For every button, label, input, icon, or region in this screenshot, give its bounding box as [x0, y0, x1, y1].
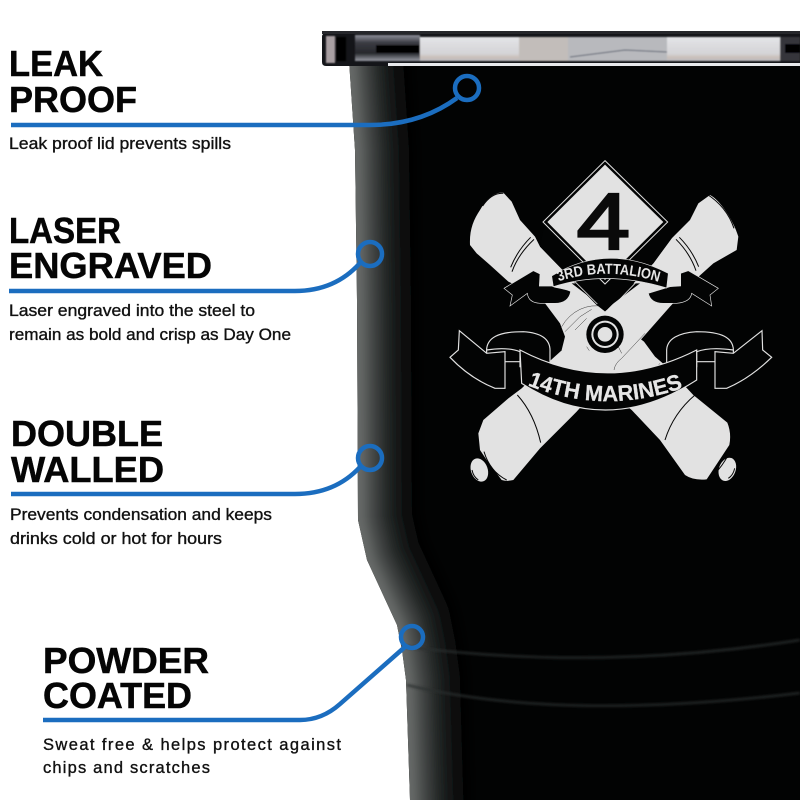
cannon knobs: [467, 455, 739, 484]
heading: double walled: WALLED: [11, 449, 164, 490]
heading: leak proof: PROOF: [9, 79, 137, 120]
text: double walled: [10, 506, 272, 548]
connector: double walled: [11, 446, 382, 494]
cannon detail lines: [472, 193, 735, 480]
black wedges along diamond: [540, 222, 672, 310]
ribbon: 3rd Battalion: [504, 258, 719, 307]
text: laser engraved: Laser engraved into the steel to: [9, 302, 255, 320]
hand sketch lines: [562, 306, 660, 370]
connector: powder coated: [43, 626, 423, 720]
ribbon: 14th Marines: [449, 330, 772, 411]
text: leak proof: Leak proof lid prevents spills: [9, 135, 231, 153]
heading: laser engraved: LASER: [9, 210, 121, 251]
connector: leak proof: [11, 76, 479, 125]
ribbon: 3rd Battalion: 3RD BATTALION: [556, 264, 660, 282]
text: powder coated: chips and scratches: [43, 759, 210, 777]
ring: [586, 316, 624, 353]
cannon: upper left to lower right: [470, 193, 730, 480]
heading: double walled: [11, 413, 164, 490]
heading: leak proof: LEAK: [9, 43, 103, 84]
diamond: [543, 161, 668, 284]
heading: laser engraved: [9, 210, 212, 286]
tumbler body: [345, 0, 800, 800]
heading: powder coated: [43, 640, 209, 716]
cannon: upper right to lower left: [478, 195, 738, 481]
ribbon: 14th Marines: 14TH MARINES: [528, 372, 682, 402]
text: powder coated: Sweat free & helps protect against: [43, 736, 341, 754]
text: laser engraved: remain as bold and crisp as Day One: [9, 326, 291, 344]
text: double walled: drinks cold or hot for hours: [10, 530, 222, 548]
text: double walled: Prevents condensation and keeps: [10, 506, 272, 524]
heading: laser engraved: ENGRAVED: [9, 245, 212, 286]
connector: laser engraved: [9, 242, 382, 291]
text: powder coated: [43, 736, 341, 777]
heading: powder coated: POWDER: [43, 640, 209, 681]
diamond: 4: [577, 177, 630, 266]
tumbler lid: [322, 31, 800, 66]
callout: double walled: [10, 413, 382, 548]
heading: powder coated: COATED: [43, 675, 192, 716]
heading: leak proof: [9, 43, 137, 120]
callout: powder coated: [43, 626, 423, 777]
callout: leak proof: [9, 43, 479, 153]
thin lines below diamond: [575, 282, 637, 306]
callout: laser engraved: [9, 210, 382, 344]
emblem: 3rd Battalion 14th Marines: [449, 160, 772, 482]
text: laser engraved: [9, 302, 291, 344]
heading: double walled: DOUBLE: [11, 413, 163, 454]
